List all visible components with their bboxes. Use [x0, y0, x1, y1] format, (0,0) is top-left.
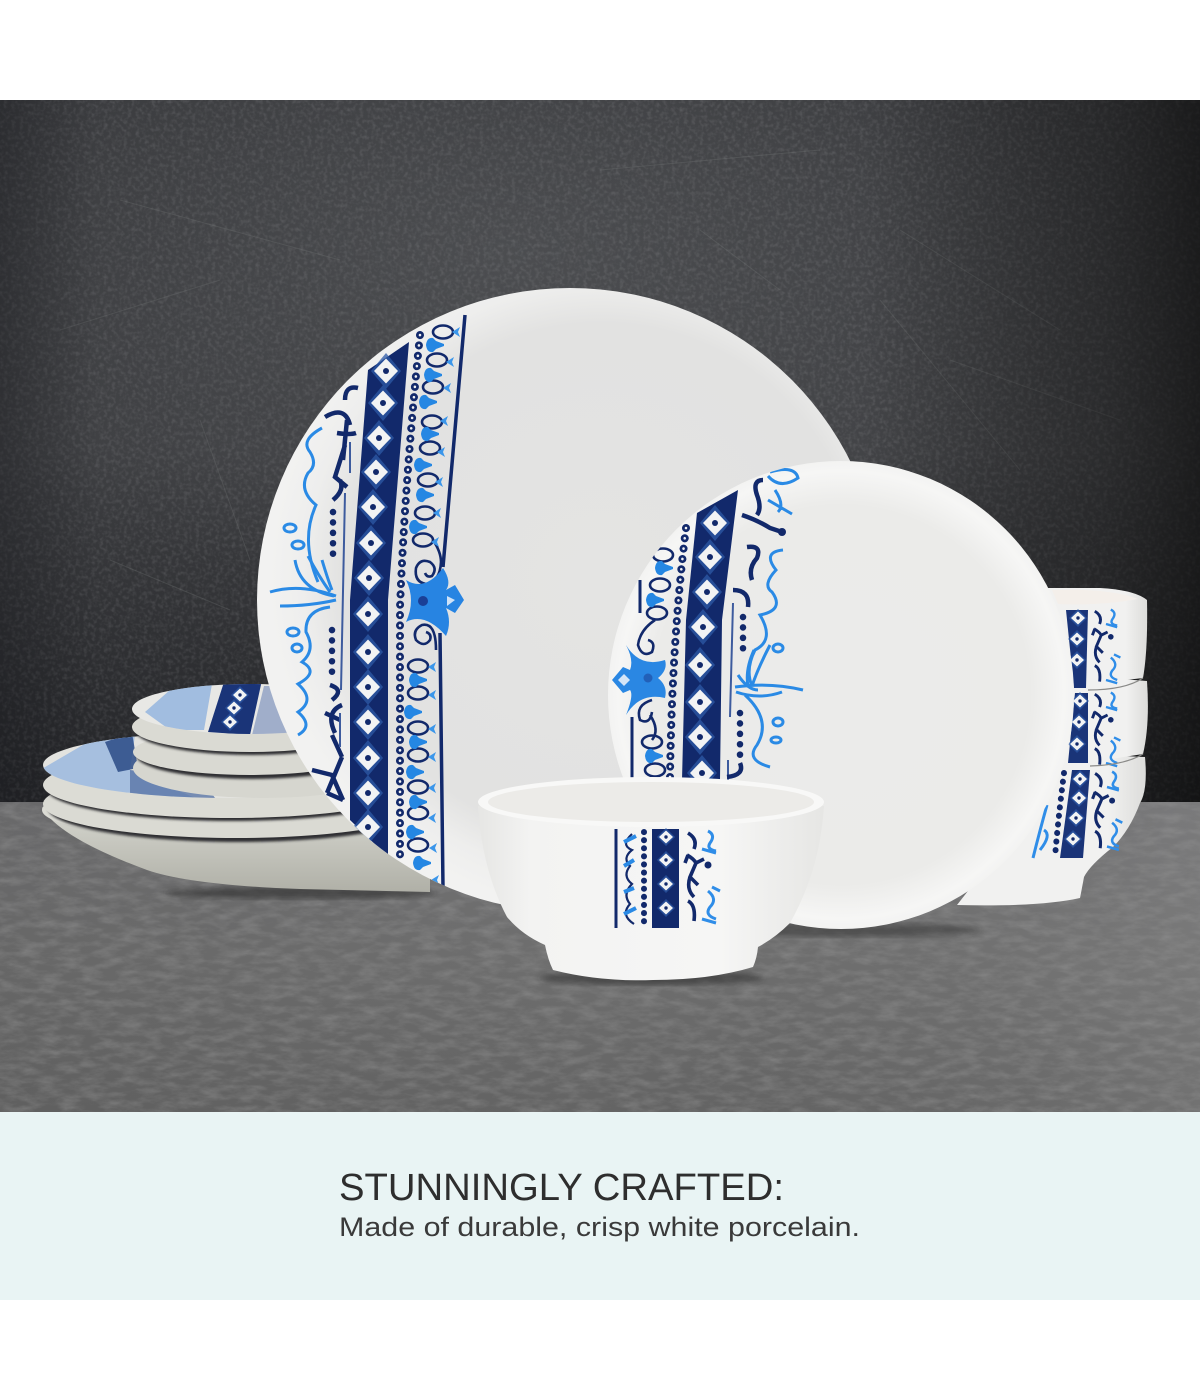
- left flourish: [270, 428, 336, 735]
- photo: backdrop wall: [0, 100, 1200, 805]
- centre fleur motif: [406, 568, 464, 636]
- lower loop vine: [404, 625, 439, 885]
- left loop vine: [632, 548, 673, 780]
- dark blue diamond stripe: [682, 490, 738, 791]
- middle bowl: [1040, 673, 1148, 770]
- dark scroll bottom: [312, 685, 343, 800]
- bottom bowl: [957, 750, 1146, 905]
- left plate stack: [40, 680, 430, 892]
- upper loop vine: [409, 326, 460, 584]
- dark scroll: [733, 480, 782, 607]
- heading: STUNNINGLY CRAFTED:: [339, 1167, 784, 1209]
- dinner plate: [257, 288, 883, 912]
- cereal bowl decorative band: [616, 828, 720, 928]
- dinner plate decorative band: [270, 315, 465, 888]
- bowl interior: [488, 782, 814, 822]
- caption band: [0, 1112, 1200, 1300]
- left fleur motif: [612, 645, 666, 715]
- dark blue diamond stripe: [350, 342, 409, 857]
- top bowl: [1040, 588, 1147, 690]
- large top plate: [43, 736, 344, 823]
- inner small plates: [132, 702, 393, 798]
- body text: Made of durable, crisp white porcelain.: [339, 1212, 860, 1242]
- right flourish: [735, 470, 803, 767]
- salad plate: [608, 461, 1074, 929]
- dots and thin lines: [332, 512, 333, 675]
- dots and thin line: [740, 617, 743, 755]
- salad plate decorative band: [612, 470, 803, 791]
- second plate: [43, 770, 429, 842]
- photo: concrete table: [0, 802, 1200, 1112]
- cereal bowl: [478, 777, 824, 985]
- dotted column: [670, 528, 686, 778]
- bottom plate: [42, 780, 430, 892]
- right stack of bowls: [957, 588, 1148, 905]
- dark scroll top: [325, 388, 358, 500]
- outer blue line: [440, 315, 465, 888]
- dotted column: [400, 335, 420, 860]
- small top plate: [132, 684, 287, 734]
- bowl rim: [478, 777, 824, 827]
